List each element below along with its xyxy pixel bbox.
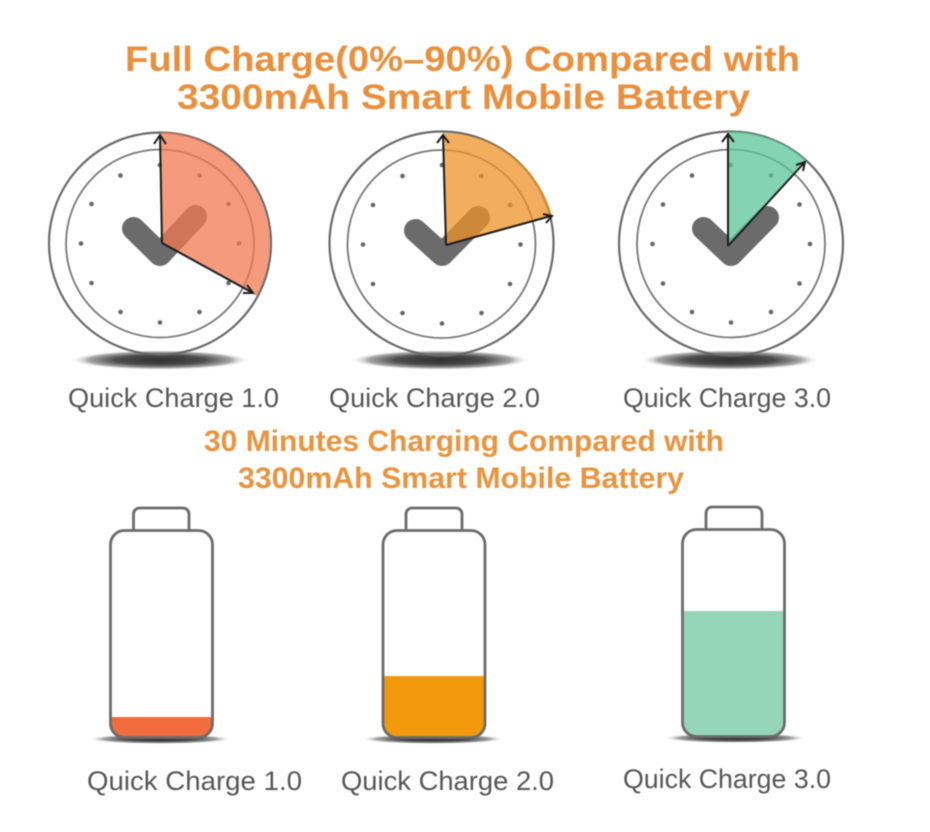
title: full charge comparison: Full Charge(0%–90%) Compared with xyxy=(125,39,800,79)
panel: clock Quick Charge 3.0 xyxy=(619,131,843,413)
charge time wedge xyxy=(161,132,270,296)
panel: clock Quick Charge 1.0 xyxy=(49,132,279,413)
label: Quick Charge 2.0 xyxy=(341,766,554,796)
battery outline xyxy=(383,508,485,738)
hour dots xyxy=(650,163,812,325)
label: Quick Charge 2.0 xyxy=(329,383,540,413)
title: full charge comparison xyxy=(125,39,800,117)
hour dots xyxy=(361,163,523,326)
battery outline xyxy=(110,508,212,738)
battery shadow xyxy=(88,734,232,744)
panel: battery Quick Charge 1.0 xyxy=(87,508,302,796)
heading: 30 minutes charging comparison: 30 Minutes Charging Compared with xyxy=(204,425,724,458)
heading: 30 minutes charging comparison xyxy=(204,425,724,495)
arrows xyxy=(437,135,552,245)
clock face xyxy=(619,132,843,356)
battery charge level xyxy=(383,676,485,737)
clock face xyxy=(49,132,271,354)
arrows xyxy=(722,134,805,246)
clock shadow xyxy=(350,350,530,370)
charge time wedge xyxy=(443,133,552,245)
panel: clock Quick Charge 2.0 xyxy=(329,132,554,413)
title: full charge comparison: 3300mAh Smart Mobile Battery xyxy=(177,77,750,117)
clock hands xyxy=(134,216,196,254)
panel: battery Quick Charge 3.0 xyxy=(623,507,831,794)
clock hands xyxy=(704,218,768,254)
panel: battery Quick Charge 2.0 xyxy=(341,508,554,796)
heading: 30 minutes charging comparison: 3300mAh Smart Mobile Battery xyxy=(238,462,684,495)
label: Quick Charge 1.0 xyxy=(68,383,279,413)
charge time wedge xyxy=(728,131,806,246)
clock shadow xyxy=(70,350,250,370)
battery charge level xyxy=(682,611,785,737)
battery shadow xyxy=(663,733,807,743)
clock face xyxy=(330,132,554,356)
label: Quick Charge 3.0 xyxy=(623,383,831,413)
battery outline xyxy=(682,507,784,736)
clock hands xyxy=(416,218,478,254)
battery charge level xyxy=(111,717,212,738)
battery shadow xyxy=(361,734,505,744)
label: Quick Charge 1.0 xyxy=(87,766,302,796)
clock shadow xyxy=(640,350,820,370)
arrows xyxy=(154,135,253,293)
hour dots xyxy=(79,163,241,325)
label: Quick Charge 3.0 xyxy=(623,764,831,794)
